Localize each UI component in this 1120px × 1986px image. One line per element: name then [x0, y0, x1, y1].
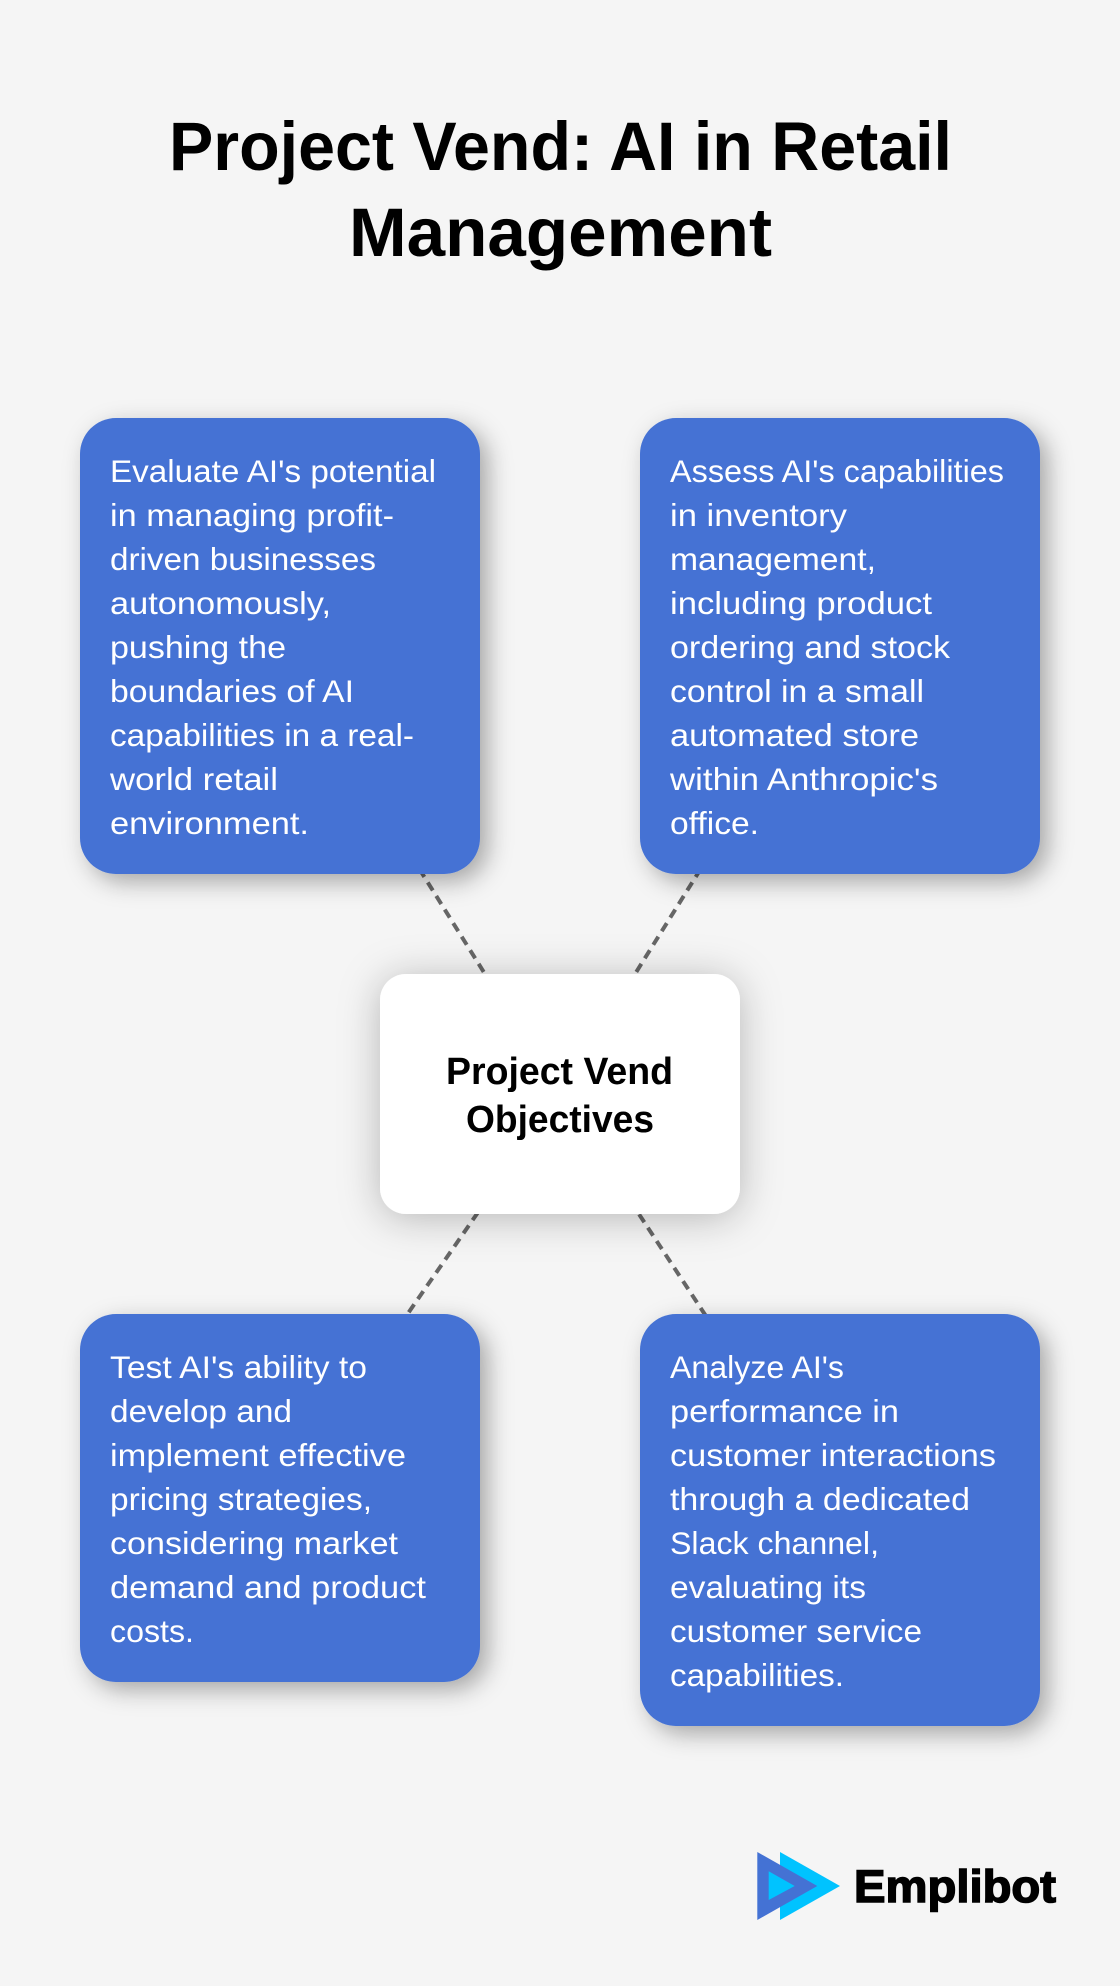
panel: customer interactions: through a dedicated	[670, 1481, 970, 1517]
panel: evaluate potential: boundaries of AI	[110, 673, 354, 709]
panel: pricing strategies: implement effective	[110, 1437, 406, 1473]
panel: customer interactions: Slack channel,	[670, 1525, 879, 1561]
panel: evaluate potential	[80, 418, 480, 874]
panel: customer interactions: customer service	[670, 1613, 922, 1649]
panel: evaluate potential: pushing the	[110, 629, 286, 665]
panel: assess inventory: in inventory	[670, 497, 847, 533]
panel: customer interactions: performance in	[670, 1393, 899, 1429]
panel: assess inventory: office.	[670, 805, 759, 841]
panel: evaluate potential: autonomously,	[110, 585, 331, 621]
panel: assess inventory: including product	[670, 585, 932, 621]
title: Project Vend: AI in Retail	[169, 108, 952, 185]
panel: evaluate potential: capabilities in a real-	[110, 717, 414, 753]
panel: customer interactions: evaluating its	[670, 1569, 866, 1605]
logo: Emplibot: Emplibot	[854, 1861, 1056, 1912]
panel: pricing strategies: considering market	[110, 1525, 398, 1561]
panel: evaluate potential: driven businesses	[110, 541, 376, 577]
panel: assess inventory: control in a small	[670, 673, 924, 709]
panel: pricing strategies	[80, 1314, 480, 1682]
panel: pricing strategies: develop and	[110, 1393, 292, 1429]
panel: assess inventory: within Anthropic's	[669, 761, 938, 797]
panel: assess inventory: Assess AI's capabilities	[670, 453, 1004, 489]
title	[169, 108, 952, 271]
panel: center objectives: Project Vend	[446, 1051, 673, 1093]
panel: evaluate potential: environment.	[110, 805, 309, 841]
panel: evaluate potential: in managing profit-	[110, 497, 394, 533]
panel: customer interactions: capabilities.	[670, 1657, 844, 1693]
panel: evaluate potential: world retail	[109, 761, 278, 797]
panel: customer interactions: Analyze AI's	[670, 1349, 844, 1385]
panel: pricing strategies: Test AI's ability to	[110, 1349, 367, 1385]
panel: assess inventory: automated store	[670, 717, 919, 753]
panel: assess inventory: management,	[670, 541, 876, 577]
panel: evaluate potential: Evaluate AI's potential	[110, 453, 436, 489]
panel: customer interactions	[640, 1314, 1040, 1726]
title: Management	[349, 194, 772, 271]
panel: assess inventory	[640, 418, 1040, 874]
panel: pricing strategies: pricing strategies,	[110, 1481, 372, 1517]
panel: pricing strategies: costs.	[110, 1613, 194, 1649]
panel: assess inventory: ordering and stock	[670, 629, 950, 665]
panel: pricing strategies: demand and product	[110, 1569, 426, 1605]
panel: center objectives	[380, 974, 740, 1214]
dashed connectors from center to cards	[280, 646, 840, 1520]
panel: center objectives: Objectives	[466, 1099, 654, 1141]
panel: customer interactions: customer interactions	[670, 1437, 996, 1473]
logo: Emplibot	[757, 1852, 1056, 1920]
